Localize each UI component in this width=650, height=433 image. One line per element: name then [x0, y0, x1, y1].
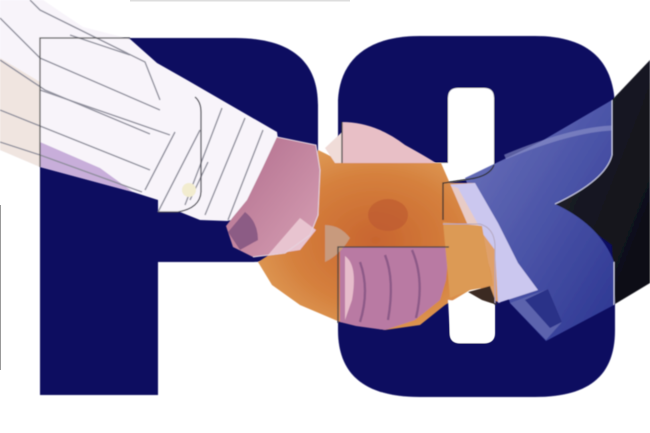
top edge shadow [130, 0, 350, 2]
white notch and counters of the 3 [335, 88, 494, 343]
left shirt sleeve [0, 0, 281, 221]
sleeve vent button tab [510, 289, 562, 340]
pink knuckles [340, 247, 449, 330]
left edge mark [0, 205, 1, 370]
shirt stripes [0, 0, 263, 220]
orange hands [258, 150, 493, 330]
right arm dark suit [555, 60, 650, 304]
pink wrist and fingers [226, 137, 320, 257]
handshake photograph [0, 0, 650, 343]
peach wrist area [441, 183, 480, 228]
wrist under right cuff [443, 222, 492, 298]
outline strokes [40, 38, 614, 323]
shirt cuff right [445, 183, 538, 303]
letter P: P [28, 4, 281, 429]
pink thumb over letter [342, 122, 436, 163]
shirt button [182, 183, 196, 197]
palm highlight [368, 199, 408, 231]
wrist backing behind right cuff [441, 183, 500, 303]
right arm blue sleeve [465, 100, 614, 341]
digit 3: 3 [372, 4, 583, 429]
